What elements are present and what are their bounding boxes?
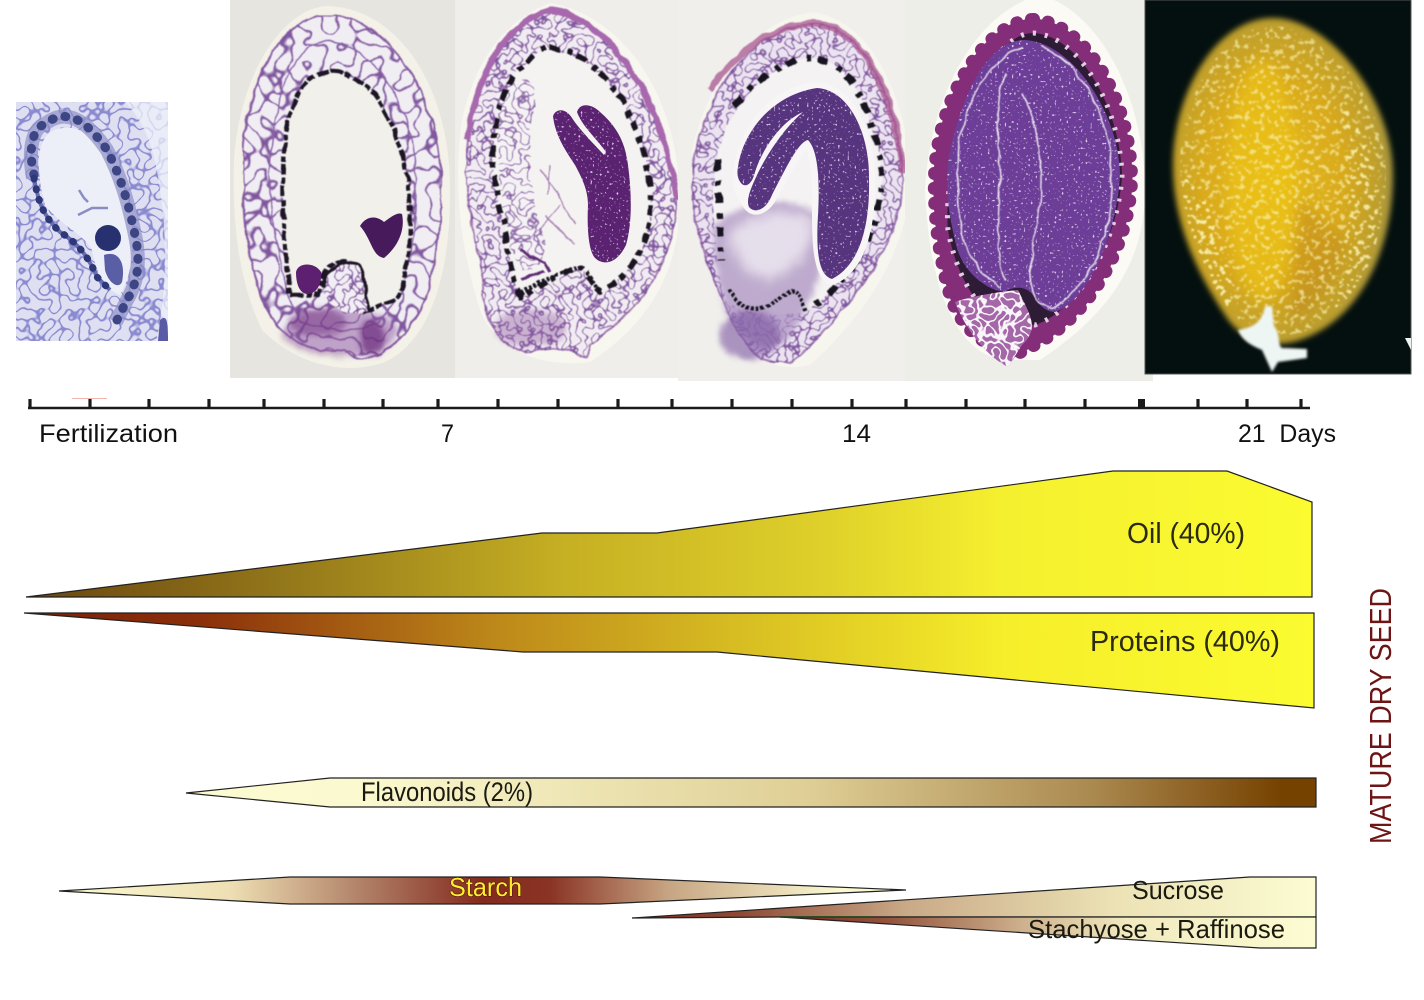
photograph: mature dry yellow seed (1145, 0, 1411, 374)
vertical label: mature dry seed: MATURE DRY SEED (1363, 588, 1398, 844)
band: stachyose and raffinose (780, 914, 1316, 948)
band: oil accumulation (26, 471, 1312, 597)
axis label: day 7: 7 (441, 420, 454, 448)
band: starch (59, 872, 906, 904)
axis label: day 14: 14 (842, 420, 871, 448)
band: oil accumulation: Oil (40%) (1127, 518, 1245, 550)
band: protein accumulation (24, 613, 1314, 708)
micrograph: mature embryo filling the seed (905, 0, 1153, 381)
axis label: 21 Days: 21 Days (1238, 420, 1336, 448)
band: sucrose (632, 875, 1316, 918)
micrograph: early heart-stage embryo (230, 0, 455, 378)
micrograph: bent cotyledon embryo (678, 0, 912, 381)
axis label: Fertilization: Fertilization (39, 420, 178, 448)
band: protein accumulation: Proteins (40%) (1090, 626, 1280, 658)
band: starch: Starch (449, 872, 522, 902)
band: sucrose: Sucrose (1132, 875, 1224, 905)
band: flavonoids (186, 777, 1316, 807)
micrograph: torpedo-stage embryo (455, 0, 680, 378)
band: flavonoids: Flavonoids (2%) (361, 777, 533, 807)
micrograph: fertilized ovule, blue stain (16, 102, 168, 341)
band: stachyose and raffinose: Stachyose + Raffinose (1028, 914, 1285, 944)
timeline axis with day ticks (28, 398, 1310, 408)
